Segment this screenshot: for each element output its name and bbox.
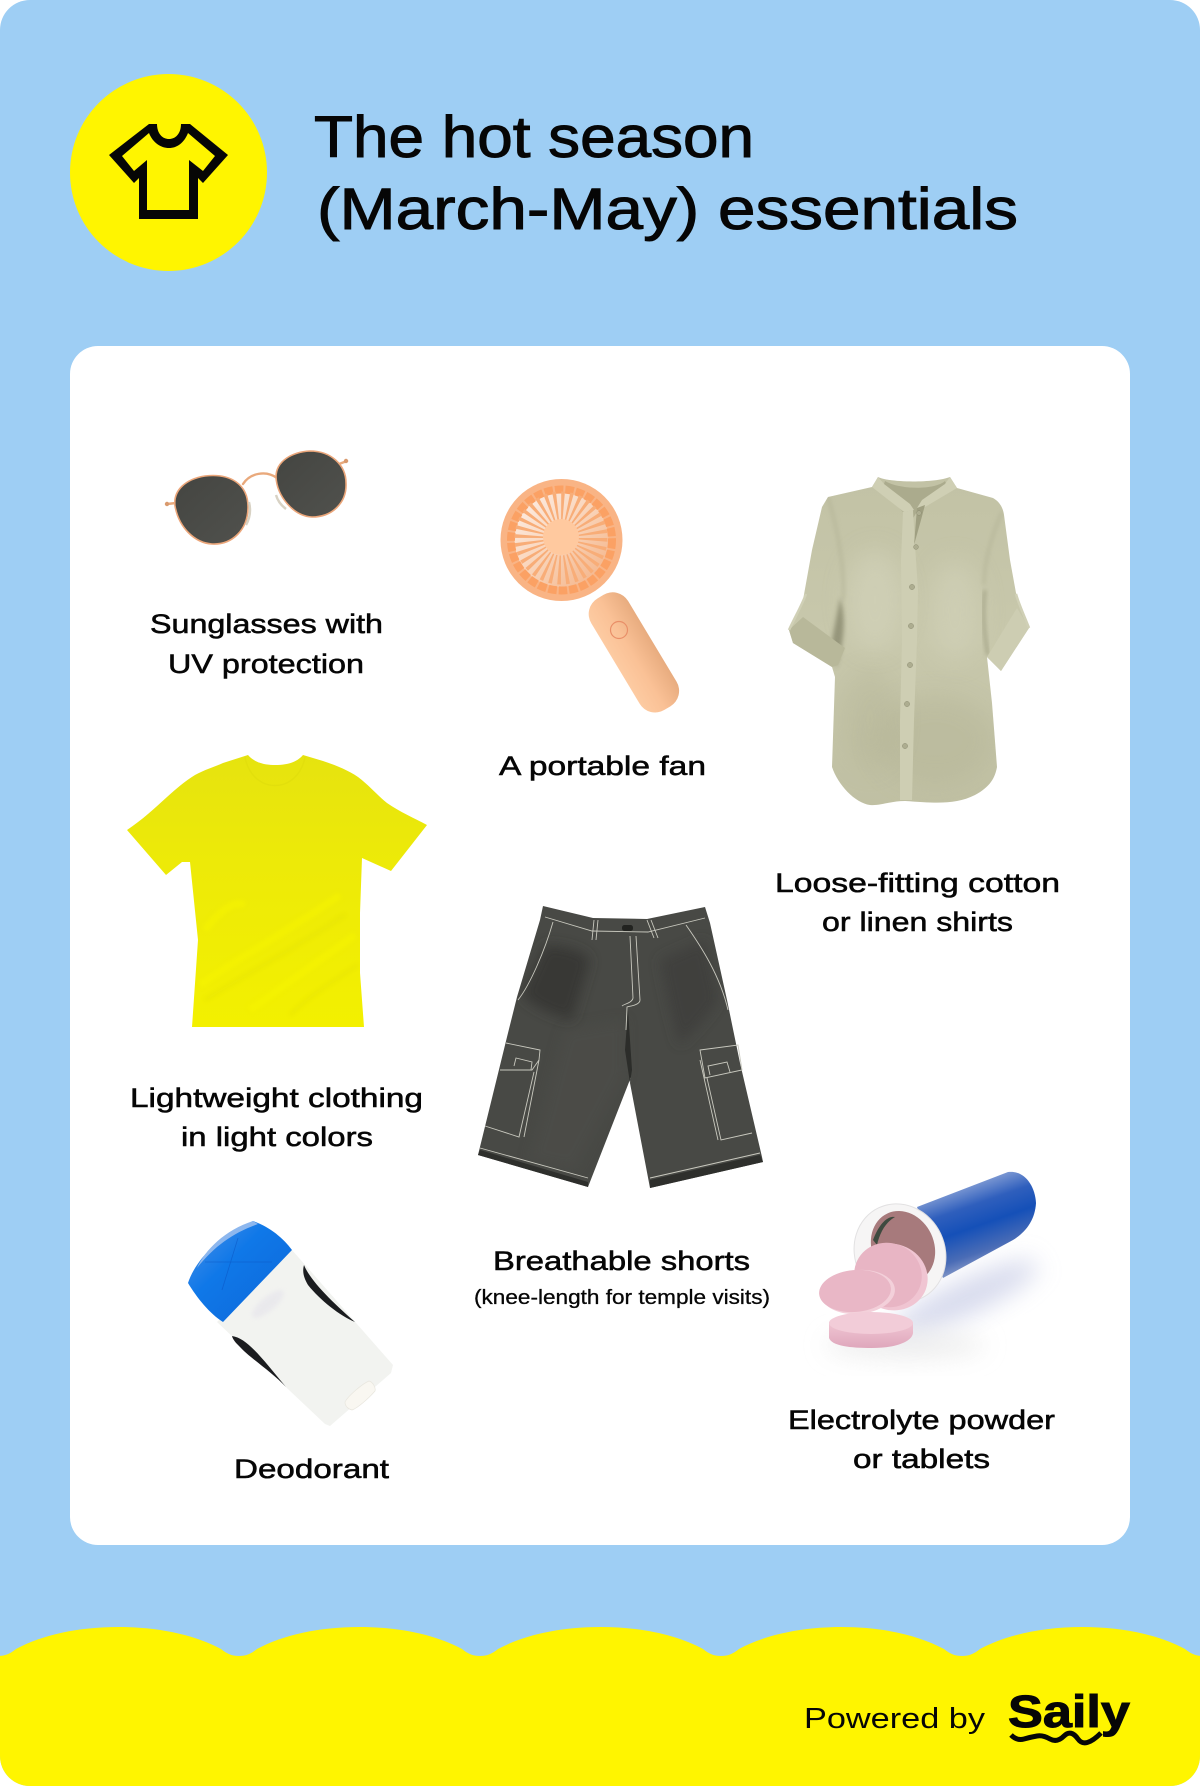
label: electrolyte: or tablets [853, 1444, 990, 1474]
label: electrolyte: Electrolyte powder [788, 1405, 1055, 1435]
label: sunglasses: Sunglasses with [150, 609, 383, 639]
label: sunglasses [150, 609, 383, 679]
footer wave [0, 1627, 1200, 1786]
label: deodorant: Deodorant [234, 1454, 390, 1484]
label: portable fan: A portable fan [499, 751, 706, 781]
label: t-shirt: in light colors [181, 1122, 373, 1152]
grips [232, 1265, 355, 1387]
icon: t-shirt in yellow circle [70, 74, 267, 271]
footer: powered by: Powered by [804, 1703, 986, 1735]
icon: tablet tube [817, 1172, 1045, 1359]
label: shorts: (knee-length for temple visits) [474, 1286, 770, 1309]
header [70, 74, 1018, 271]
label: t-shirt: Lightweight clothing [130, 1083, 423, 1113]
label: electrolyte [788, 1405, 1055, 1474]
icon: deodorant stick [188, 1221, 393, 1426]
title [314, 105, 1018, 242]
label: sunglasses: UV protection [168, 649, 364, 679]
label: linen shirts: Loose-fitting cotton [775, 868, 1060, 898]
icon: yellow t-shirt [127, 755, 427, 1027]
label: t-shirt [130, 1083, 423, 1152]
logo: Saily: Saily [1008, 1686, 1130, 1737]
item: portable fan [499, 479, 706, 781]
panel: essentials card [70, 346, 1130, 1545]
item: deodorant [188, 1221, 393, 1484]
label: shorts: Breathable shorts [493, 1246, 750, 1276]
icon: cargo shorts [478, 906, 763, 1188]
icon: linen shirt [789, 477, 1029, 805]
item: sunglasses [150, 451, 383, 679]
label: linen shirts [775, 868, 1060, 937]
item: shorts [474, 906, 770, 1309]
title: (March-May) essentials [317, 177, 1018, 242]
label: shorts [474, 1246, 770, 1309]
label: linen shirts: or linen shirts [822, 907, 1013, 937]
icon: fan [500, 479, 686, 719]
title: The hot season [314, 105, 754, 170]
icon: sunglasses [165, 451, 348, 544]
item: t-shirt [127, 755, 427, 1152]
item: linen shirt [775, 477, 1060, 937]
item: electrolyte tablets [788, 1172, 1055, 1474]
